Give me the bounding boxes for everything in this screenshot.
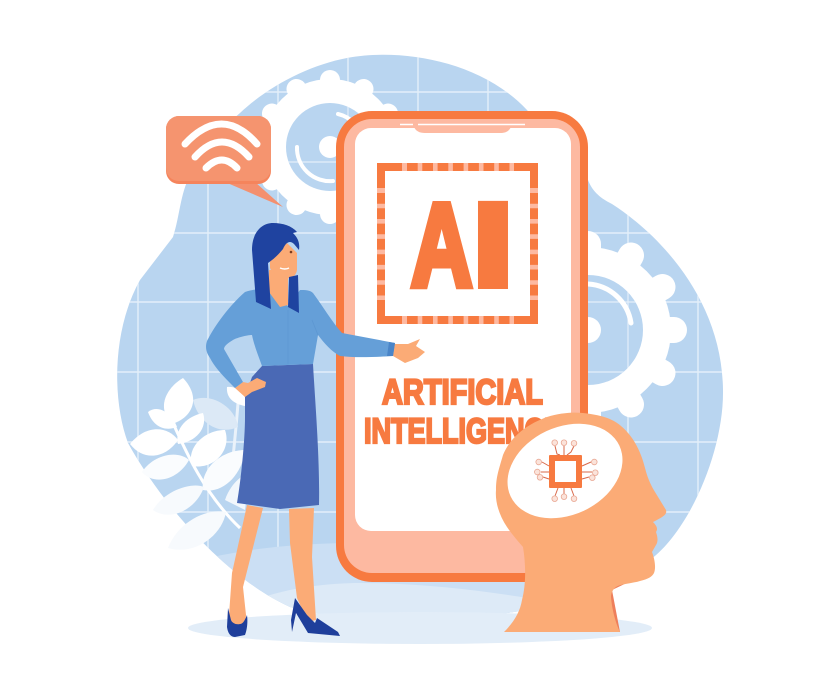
chip circuit <box>534 440 598 502</box>
face <box>270 243 297 278</box>
hand on hip <box>235 378 266 397</box>
shirt <box>206 289 395 388</box>
gear: upper left <box>262 79 398 215</box>
artificial intelligence text: ARTIFICIAL <box>382 373 543 412</box>
speech bubble with wifi icon <box>166 116 283 207</box>
decorative leaves <box>130 378 250 550</box>
neck shading <box>606 580 633 632</box>
icon: wifi <box>185 124 257 168</box>
AI heading: A <box>411 179 472 311</box>
woman presenter <box>206 223 425 637</box>
brain area <box>492 406 638 536</box>
neck <box>269 270 288 307</box>
smartphone <box>336 111 588 582</box>
head with chip <box>492 406 666 632</box>
AI chip frame <box>377 163 538 324</box>
legs <box>229 505 263 626</box>
background blob with grid <box>117 54 723 614</box>
smile <box>280 268 289 269</box>
notch <box>413 123 512 133</box>
artificial intelligence text <box>364 373 562 451</box>
eye <box>290 251 292 253</box>
AI heading <box>411 179 513 311</box>
gear: right <box>588 231 687 418</box>
pointing hand <box>393 339 425 363</box>
artificial intelligence text: INTELLIGENCE <box>364 412 562 451</box>
head silhouette <box>496 413 666 632</box>
screen <box>355 128 571 531</box>
skirt <box>237 364 319 509</box>
AI heading: I <box>472 179 513 311</box>
shoes <box>227 608 247 637</box>
hair <box>252 223 299 309</box>
ground shadow <box>188 612 652 644</box>
